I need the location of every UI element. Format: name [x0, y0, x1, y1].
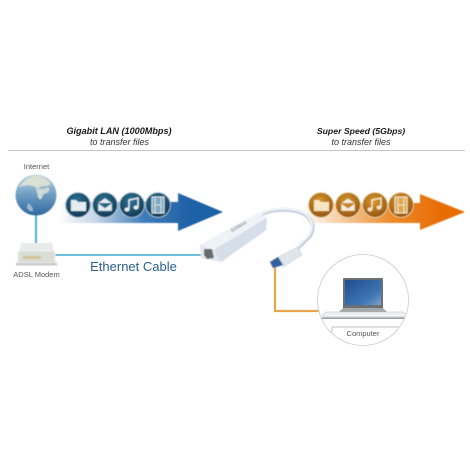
laptop screen [343, 278, 383, 309]
label: Ethernet Cable: Ethernet Cable [90, 259, 177, 274]
icon: ADSL modem [16, 243, 57, 266]
icon: folder [66, 192, 90, 218]
heading: Super Speed: Super Speed (5Gbps) [317, 126, 405, 136]
heading: Gigabit LAN [66, 126, 172, 147]
icon: envelope [92, 192, 118, 218]
adapter side face [214, 218, 267, 262]
icon: film strip gold [388, 192, 414, 218]
callout: computer circle [318, 254, 408, 349]
laptop base [338, 308, 388, 313]
connection: ethernet cable line [55, 254, 206, 256]
connection: globe to modem [35, 214, 37, 246]
label: ADSL Modem: ADSL Modem [13, 270, 60, 279]
icons: gold media circles [308, 192, 414, 218]
adapter top surface [200, 213, 267, 250]
icon: music note gold [362, 192, 388, 218]
heading: Super Speed [317, 126, 405, 147]
device: USB Ethernet adapter [200, 209, 313, 268]
divider line [8, 150, 465, 152]
ethernet port [204, 249, 214, 259]
arrow: blue data flow [58, 193, 223, 231]
icon: folder gold [308, 192, 334, 218]
icon: music note [120, 192, 144, 218]
adapter front face [200, 245, 221, 262]
heading: Gigabit LAN: Gigabit LAN (1000Mbps) [66, 126, 172, 136]
table [322, 312, 406, 345]
connection: USB to computer [275, 264, 342, 311]
label: Internet: Internet [24, 162, 50, 171]
arrow: orange data flow [302, 194, 465, 230]
heading: Gigabit LAN: to transfer files [90, 137, 150, 147]
USB plug [278, 247, 302, 267]
adapter body [200, 213, 267, 262]
icon: globe [16, 174, 56, 216]
icon: envelope gold [336, 192, 360, 218]
icons: blue media circles [66, 192, 170, 218]
heading: Super Speed: to transfer files [331, 137, 391, 147]
USB cable [262, 210, 313, 249]
brand label: EDIMAX [230, 220, 248, 233]
icon: film strip [146, 192, 170, 218]
label: Computer: Computer [347, 329, 380, 338]
